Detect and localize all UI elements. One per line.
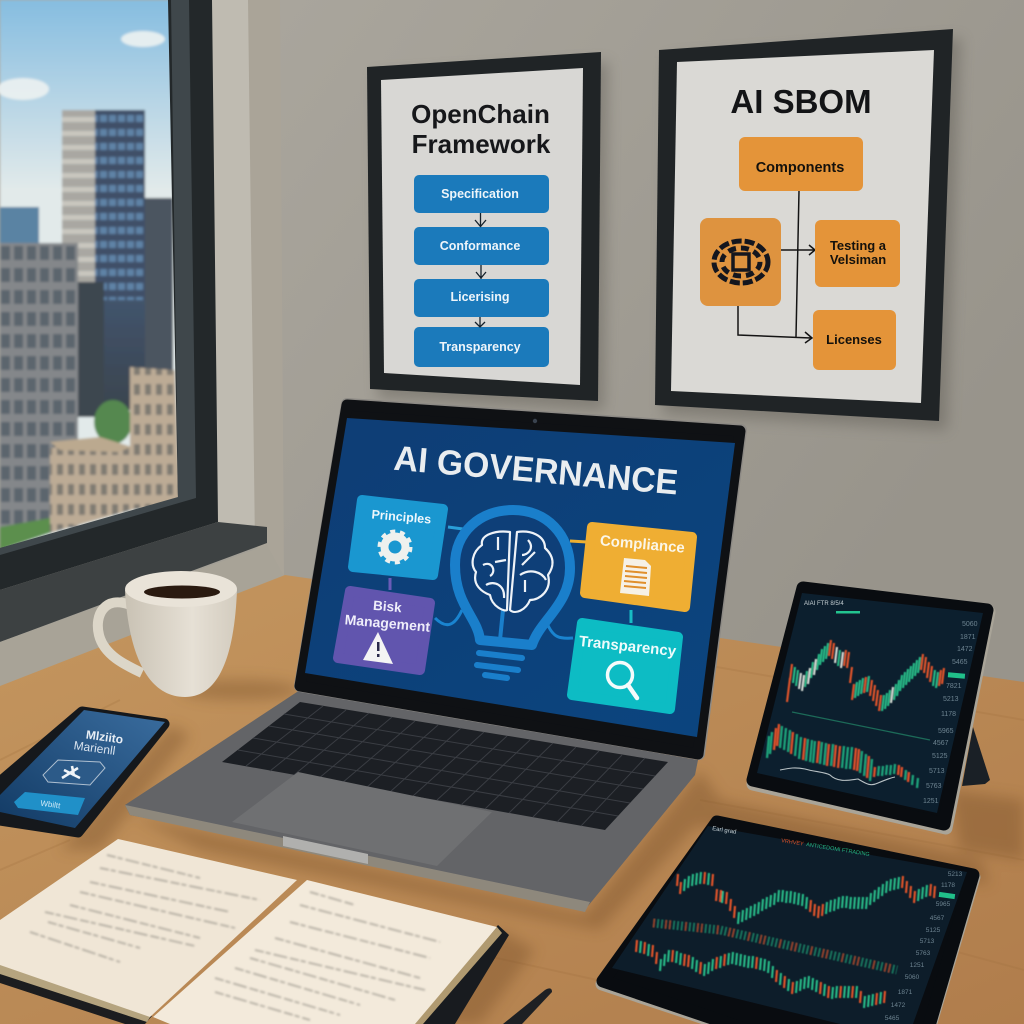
flow: OpenChain steps: Specification (441, 187, 519, 201)
chart: candlesticks upper (787, 640, 944, 711)
notebook (0, 839, 509, 1024)
box: Testing: Testing a (830, 238, 887, 253)
price labels: 7821 (946, 683, 962, 690)
flow: OpenChain steps: Licerising (450, 290, 510, 304)
price labels: 5060 (905, 974, 920, 981)
price labels: 5713 (920, 938, 935, 945)
wall (0, 0, 1024, 720)
handwriting: right page (215, 892, 440, 1020)
desk (0, 575, 1024, 1024)
flow: OpenChain steps: Conformance (440, 239, 520, 253)
price labels: 1472 (957, 646, 973, 653)
tablet: stand-mounted trading chart (753, 588, 990, 828)
price labels: 1178 (941, 711, 956, 718)
price labels: 1251 (910, 962, 925, 969)
price labels: 1871 (960, 634, 976, 641)
tablet: flat trading chart: Earl grad (712, 826, 737, 836)
smartphone: Marienll (73, 738, 116, 758)
price labels: 5060 (962, 621, 978, 628)
box: Risk Management: Bisk (373, 598, 403, 615)
framed poster: OpenChain Framework (367, 52, 608, 410)
volume line (780, 768, 895, 785)
chart: candlesticks upper (677, 872, 935, 924)
price labels: 1251 (923, 798, 939, 805)
tablet: flat trading chart: VRHVEY (781, 838, 804, 848)
price labels: 5125 (926, 927, 941, 934)
box: Transparency: Transparency (578, 633, 678, 660)
smartphone: Wbiltt (40, 799, 62, 810)
box: Licenses (813, 310, 896, 370)
laptop (125, 404, 741, 912)
box: chip icon (700, 218, 781, 306)
right page (153, 880, 497, 1024)
price labels: 5465 (885, 1015, 900, 1022)
price labels: 5965 (938, 728, 954, 735)
box: Testing (815, 220, 900, 287)
price labels: 5125 (932, 753, 948, 760)
pen (503, 988, 552, 1024)
connectors (738, 191, 815, 343)
chart: candlesticks lower (636, 940, 885, 1008)
price labels: 5465 (952, 659, 968, 666)
desk shadows (60, 680, 1024, 1024)
chart: candlesticks lower (767, 724, 918, 788)
window recess wall (210, 0, 284, 580)
price labels: 5213 (943, 696, 959, 703)
lower wall (0, 545, 285, 686)
laptop lid (300, 405, 740, 754)
framed poster: AI SBOM (655, 29, 961, 430)
box: Risk Management: Management (344, 611, 431, 635)
price labels: 4567 (933, 740, 949, 747)
box: Principles (353, 500, 443, 575)
box: Compliance: Compliance (599, 532, 685, 557)
smartphone: Mlziito (85, 728, 124, 747)
laptop front edge (125, 805, 590, 912)
box: Compliance (585, 527, 692, 607)
left page (0, 839, 297, 1017)
price labels: 5763 (926, 783, 942, 790)
front notch (283, 836, 368, 864)
notebook cover (420, 925, 509, 1024)
box: Licenses: Licenses (826, 332, 882, 347)
tablet: flat trading chart (602, 822, 974, 1024)
tablet: flat trading chart: ANTICEDOMI FTRADING (806, 842, 870, 858)
box: Principles: Principles (371, 507, 432, 527)
price labels: 1178 (941, 882, 955, 889)
price labels (923, 621, 978, 805)
heading: OpenChain Framework: OpenChain (411, 99, 550, 129)
laptop screen (305, 418, 735, 737)
page edge (0, 962, 152, 1022)
price labels: 4567 (930, 915, 945, 922)
price labels (885, 871, 963, 1022)
box: Risk Management (338, 591, 431, 670)
laptop base (125, 690, 698, 906)
tablet: stand-mounted trading chart: AIAI FTR 8/5/4 (804, 601, 844, 607)
icon: lightbulb with brain (455, 510, 570, 678)
trackpad (232, 772, 492, 866)
price labels: 1871 (898, 989, 913, 996)
coffee mug (98, 571, 237, 697)
price labels: 5763 (916, 950, 931, 957)
cover edge (0, 963, 152, 1024)
keyboard (222, 702, 668, 830)
handwriting: left page (30, 855, 260, 962)
heading: OpenChain Framework: Framework (412, 129, 551, 159)
heading: AI GOVERNANCE: AI GOVERNANCE (392, 439, 680, 502)
box: Components: Components (756, 160, 844, 176)
window sill (0, 522, 267, 642)
window frame (0, 0, 218, 590)
connectors (390, 527, 631, 638)
window view (0, 0, 180, 550)
heading: AI SBOM: AI SBOM (730, 83, 872, 120)
box: Testing: Velsiman (830, 252, 886, 267)
flow: OpenChain steps: Transparency (439, 340, 521, 354)
chart: candlesticks middle (653, 923, 897, 970)
box: Transparency (572, 623, 678, 709)
smartphone (0, 710, 165, 832)
box: Components (739, 137, 863, 191)
laptop lid rim (300, 404, 741, 754)
price labels: 5213 (948, 871, 963, 878)
price labels: 1472 (891, 1002, 906, 1009)
price labels: 5713 (929, 768, 945, 775)
flow: OpenChain steps (414, 175, 549, 367)
price labels: 5965 (936, 901, 951, 908)
